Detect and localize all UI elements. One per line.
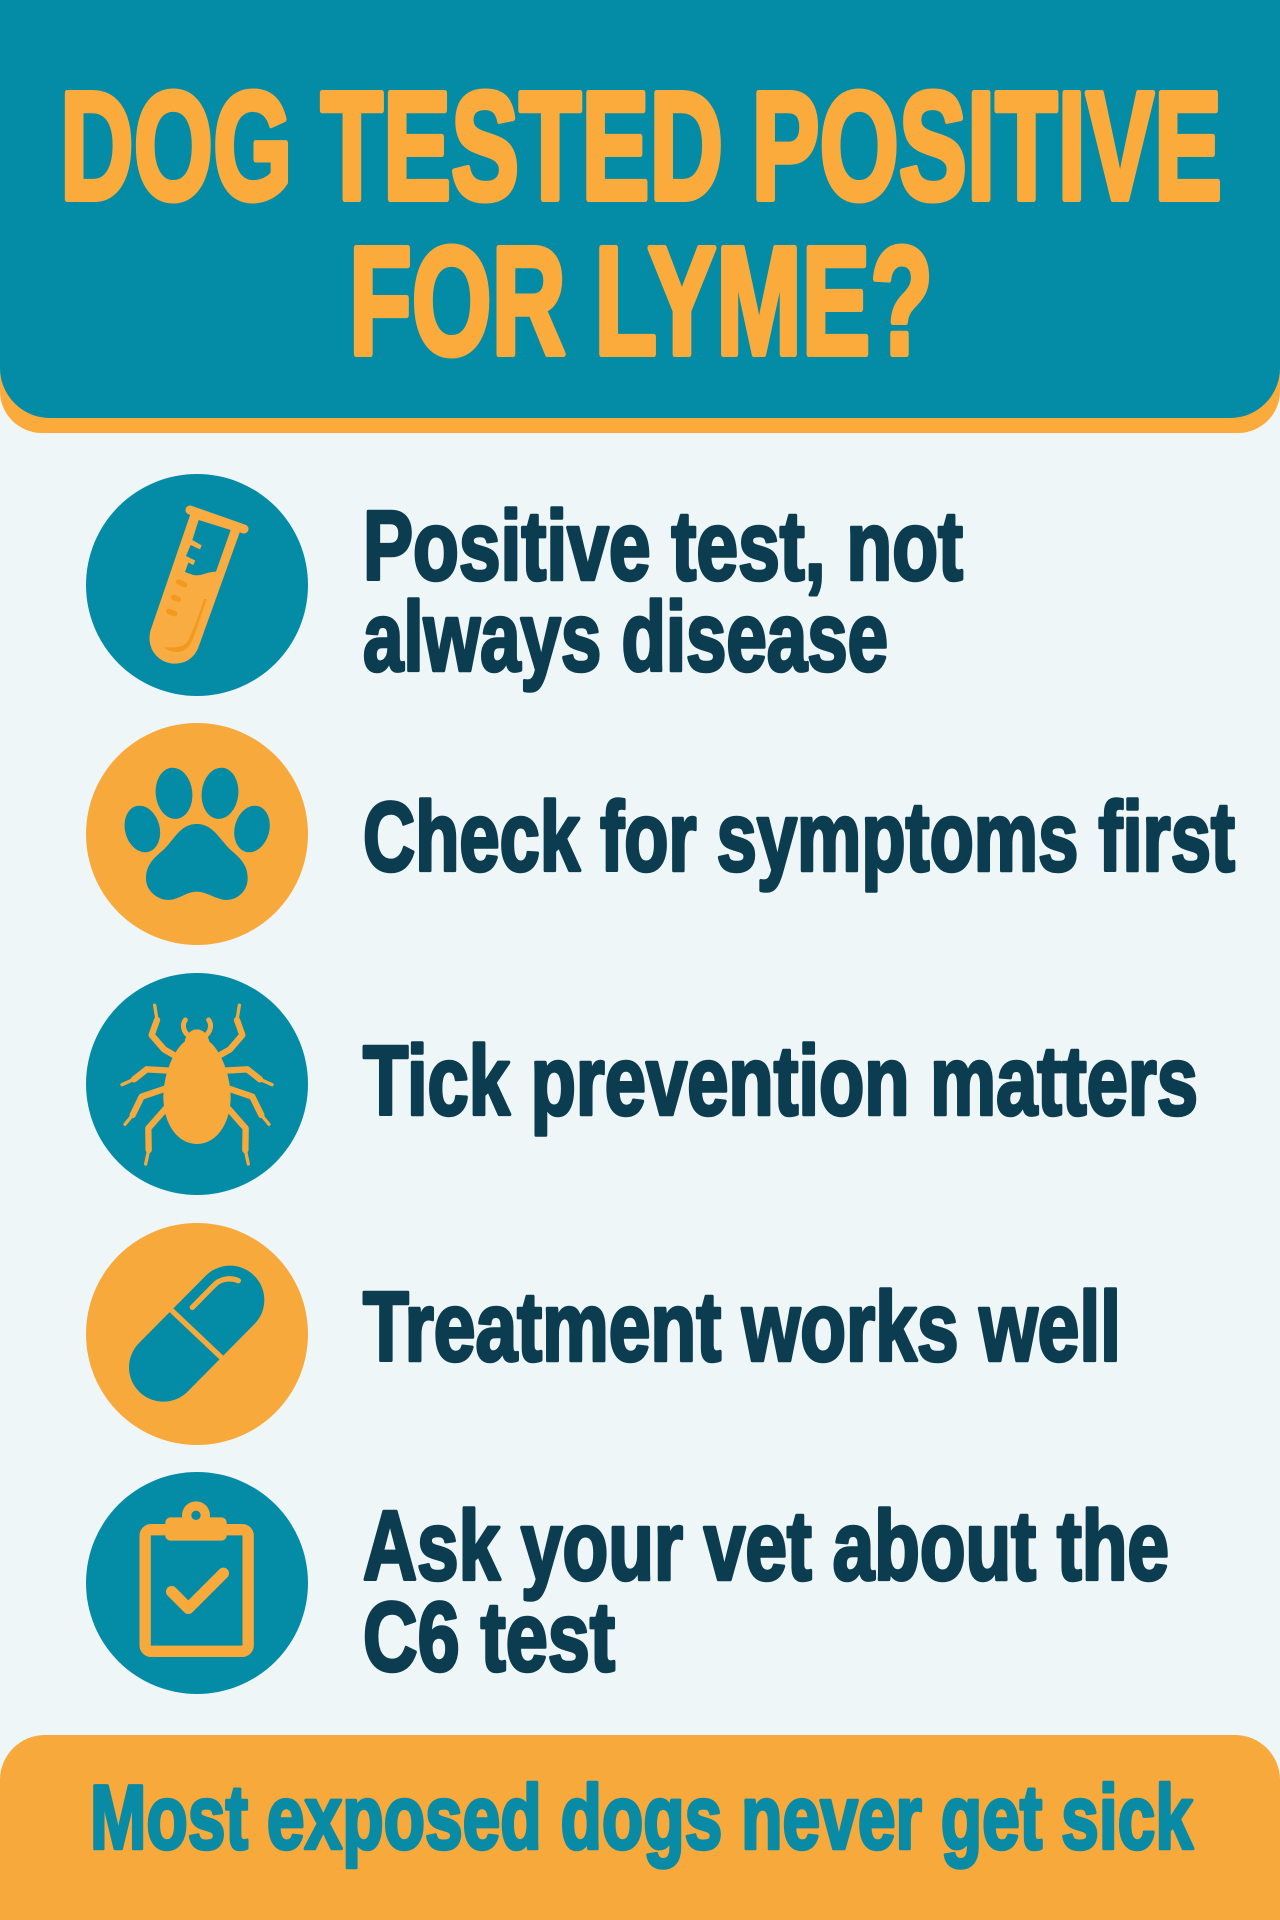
item 5: clipboard icon and text — [86, 1472, 1169, 1694]
text: ask your vet — [363, 1490, 1169, 1692]
header banner — [0, 0, 1280, 433]
text: positive test: always disease — [363, 582, 888, 692]
icon: paw — [86, 723, 308, 945]
item 3: tick icon and text — [86, 973, 1198, 1195]
title — [60, 60, 1222, 387]
footer banner — [0, 1735, 1280, 1920]
item 1: test tube icon and text — [86, 474, 963, 696]
text: ask your vet: C6 test — [363, 1582, 615, 1692]
icon: test tube — [86, 474, 308, 696]
item 4: capsule icon and text — [86, 1223, 1121, 1445]
icon: clipboard — [86, 1472, 308, 1694]
title: FOR LYME? — [349, 215, 933, 387]
text: positive test — [363, 490, 963, 692]
icon: tick — [86, 973, 308, 1195]
item 2: paw icon and text — [86, 723, 1235, 945]
text: positive test: Positive test, not — [363, 490, 963, 600]
icon: capsule — [86, 1223, 308, 1445]
